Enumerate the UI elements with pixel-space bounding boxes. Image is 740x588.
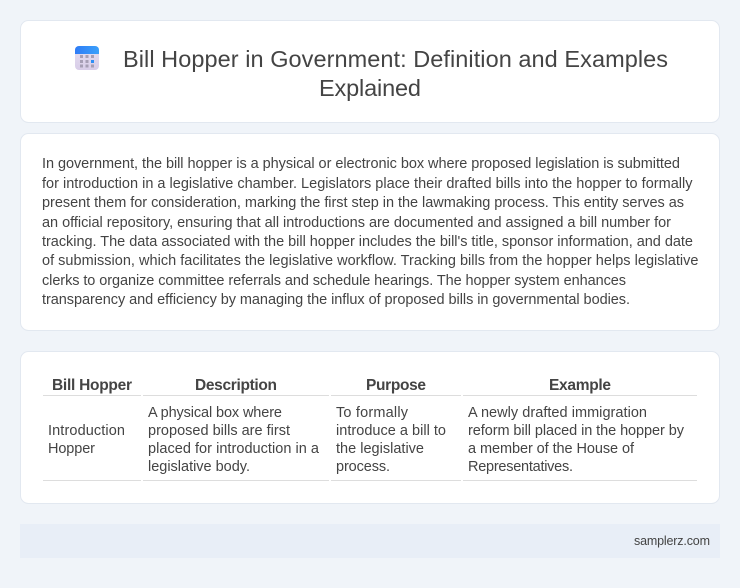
table cell: description: placed for introduction in a [148,441,320,457]
table cell: purpose: process. [336,459,390,475]
table cell: purpose: the legislative [336,441,424,457]
footer text: samplerz.com [634,534,710,548]
table cell: purpose [336,405,446,475]
description text block: transparency and efficiency by managing the influx of proposed bills in governmental bodies. [42,292,630,308]
table cell: example: Representatives. [468,459,573,475]
description text block: tracking. The data associated with the bill hopper includes the bill's title, sponsor information, and date [42,234,693,250]
description text block [42,156,698,308]
table cell: description: A physical box where [148,405,282,421]
description text block: present them for consideration, marking the first step in the lawmaking process. This entity serves as [42,195,684,211]
table cell: bill hopper: Introduction [48,423,125,439]
table header row: Description [195,377,277,394]
description text block: for introduction in a legislative chamber. Legislators place their drafted bills into the hopper to formally [42,176,693,192]
table cell: example: a member of the House of [468,441,635,457]
description text block: In government, the bill hopper is a physical or electronic box where proposed legislation is submitted [42,156,680,172]
panel: table [20,352,720,504]
description text block: clerks to organize committee referrals and schedule hearings. The hopper system enhances [42,273,626,289]
table cell: example: reform bill placed in the hopper by [468,423,685,439]
panel: description [20,134,720,330]
table header row: Purpose [366,377,426,394]
panel: title [20,20,720,122]
footer [20,524,720,558]
table cell: description: proposed bills are first [148,423,290,439]
title text: Explained [319,75,421,101]
table cell: purpose: introduce a bill to [336,423,446,439]
table cell: example [468,405,685,475]
description text block: of submission, which facilitates the legislative workflow. Tracking bills from the hopper helps legislative [42,253,698,269]
table cell: bill hopper [48,423,125,457]
table header row [52,377,611,394]
table cell: example: A newly drafted immigration [468,405,647,421]
title text [123,46,668,101]
table cell: purpose: To formally [336,405,409,421]
icon: calendar [75,46,99,70]
table cell: bill hopper: Hopper [48,441,95,457]
table header row: Bill Hopper [52,377,132,394]
table cell: description: legislative body. [148,459,250,475]
description text block: an official repository, ensuring that all introductions are documented and assigned a bill number for [42,215,671,231]
table cell: description [148,405,320,475]
title text: Bill Hopper in Government: Definition and Examples [123,46,668,72]
table header row: Example [549,377,611,394]
